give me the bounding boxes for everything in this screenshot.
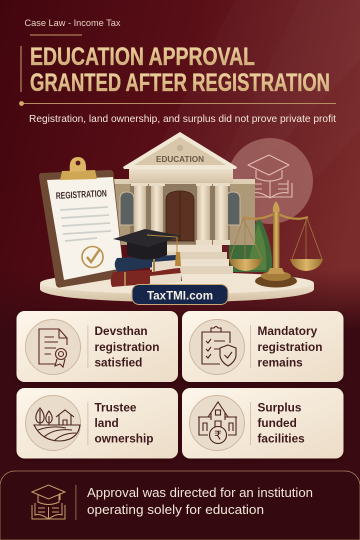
short accent line [30, 34, 82, 36]
base [255, 274, 297, 288]
card text: registration [258, 340, 322, 354]
card: Mandatory registration remains [182, 311, 344, 382]
card text: funded [258, 416, 297, 430]
chains [230, 218, 322, 259]
books and cap [111, 229, 182, 287]
icon: graduation cap on book [32, 485, 65, 519]
pans [229, 259, 262, 271]
form lines [60, 207, 111, 241]
stairs [150, 245, 233, 274]
divider [86, 325, 89, 368]
scales of justice [229, 201, 323, 288]
blue book [115, 255, 177, 272]
bottom panel [0, 471, 360, 540]
door [166, 191, 194, 241]
card text [258, 400, 305, 446]
card text: Surplus [258, 400, 302, 414]
building [113, 132, 255, 274]
clipboard [39, 157, 124, 288]
icon: building with rupee coin [190, 396, 244, 450]
rule with dot [19, 101, 336, 106]
card text: Trustee [94, 400, 137, 414]
subtitle: Registration, land ownership, and surplus did not prove private profit [29, 113, 336, 125]
icon: checklist with shield [190, 320, 244, 374]
card text: remains [258, 356, 303, 370]
card text: Devsthan [94, 324, 148, 338]
statement: Approval was directed for an institution [87, 485, 313, 500]
category label: Case Law - Income Tax [24, 18, 121, 29]
entablature [129, 168, 233, 183]
background circle with education icon [227, 138, 313, 224]
graduation cap [113, 229, 182, 266]
card text [258, 324, 322, 370]
building name: EDUCATION [156, 154, 204, 164]
post [273, 208, 280, 270]
card text: Mandatory [258, 324, 318, 338]
brand pill [132, 284, 228, 304]
card text: registration [94, 340, 159, 354]
card: Surplus funded facilities [182, 388, 344, 458]
windows [120, 192, 240, 225]
divider [249, 325, 252, 368]
card text: facilities [258, 432, 305, 446]
card text: land [94, 416, 119, 430]
statement [87, 485, 313, 517]
card: Trustee land ownership [16, 388, 178, 458]
red book [111, 268, 182, 287]
beam [243, 213, 308, 219]
title: EDUCATION APPROVAL [30, 43, 255, 71]
icon: building with rupee coin: ₹ [214, 428, 222, 442]
card text [94, 324, 159, 370]
icon: trees, house and field [26, 396, 80, 450]
card: Devsthan registration satisfied [16, 311, 178, 382]
card text: ownership [94, 432, 154, 446]
title accent bar [20, 46, 22, 92]
columns [134, 185, 228, 242]
illustration scene [39, 132, 323, 304]
trees [229, 218, 272, 272]
brand pill: TaxTMI.com [147, 288, 213, 302]
card text [94, 400, 154, 446]
divider [249, 402, 252, 445]
title [30, 43, 330, 97]
wings [113, 179, 255, 245]
clipboard heading: REGISTRATION [56, 188, 107, 202]
card text: satisfied [94, 356, 142, 370]
icon: certificate document [26, 320, 80, 374]
platform [40, 272, 314, 302]
divider [86, 402, 89, 445]
pediment [123, 132, 237, 169]
statement: operating solely for education [87, 502, 264, 517]
clip [60, 157, 97, 180]
check seal [82, 246, 103, 268]
header block [19, 18, 336, 125]
divider [74, 485, 77, 520]
